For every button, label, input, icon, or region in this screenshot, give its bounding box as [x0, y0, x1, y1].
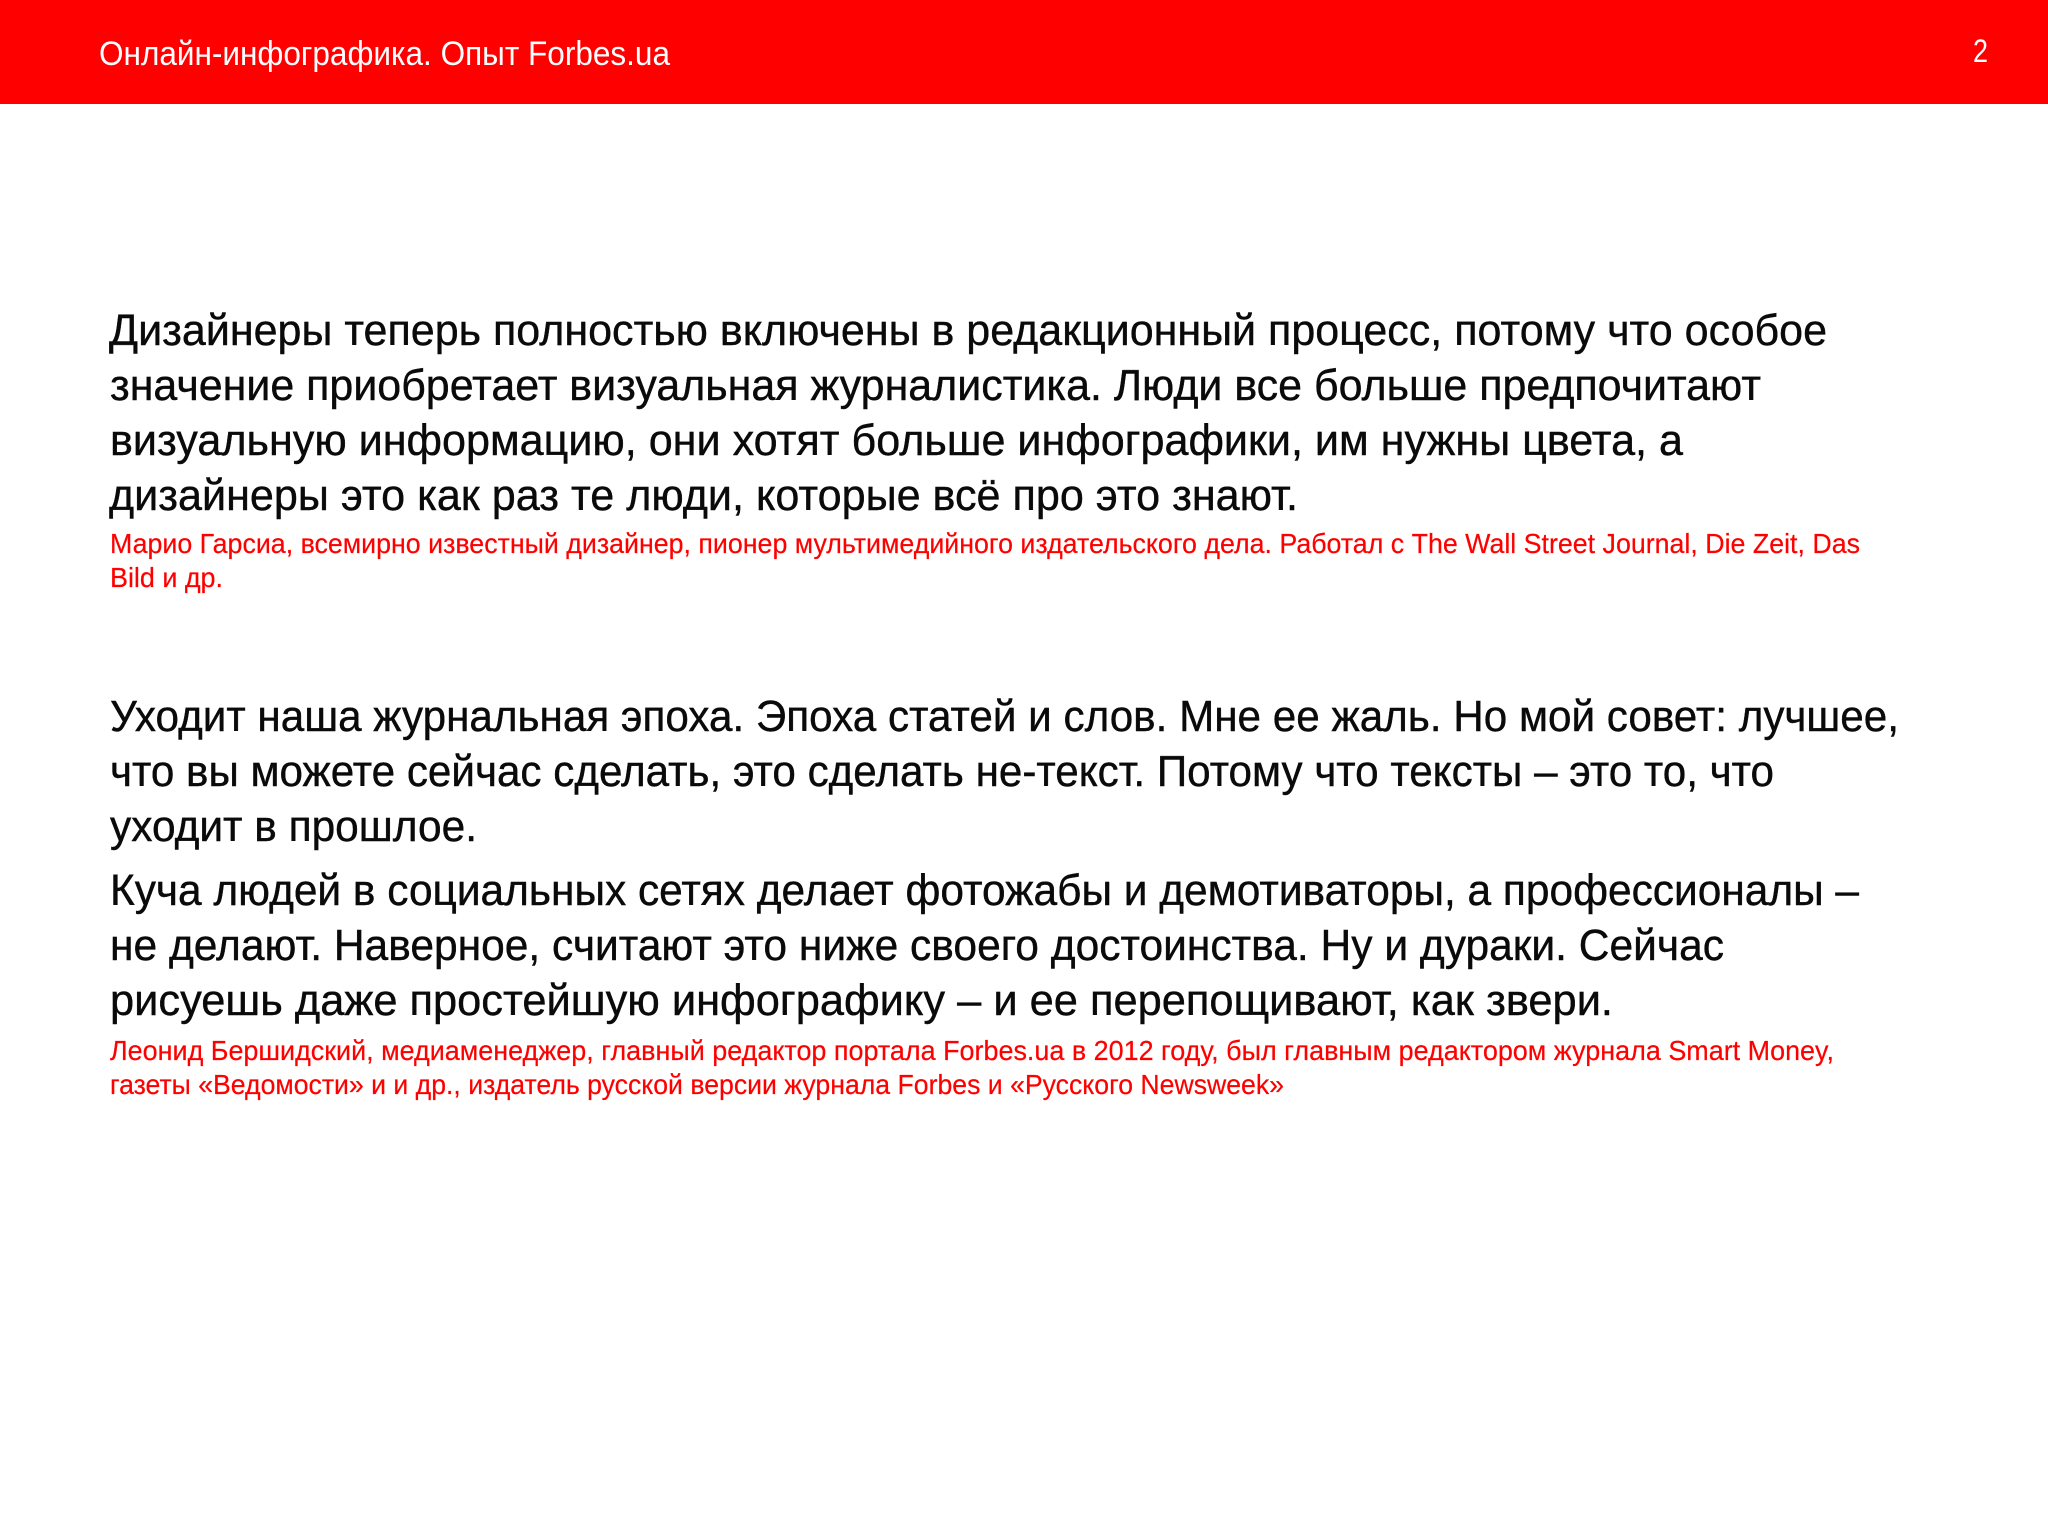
attribution: Leonid Bershidsky: газеты «Ведомости» и и др., издатель русской версии журнала Forbes и «Русского Newsweek»: [110, 1069, 1284, 1100]
quote: Leonid Bershidsky, first paragraph: [110, 692, 1899, 851]
header title: Онлайн-инфографика. Опыт Forbes.ua: [99, 35, 670, 73]
page number: 2: [1973, 33, 1988, 69]
quote: Leonid Bershidsky, first paragraph: Уходит наша журнальная эпоха. Эпоха статей и слов. Мне ее жаль. Но мой совет: лучшее,: [110, 692, 1899, 741]
attribution: Leonid Bershidsky: Леонид Бершидский, медиаменеджер, главный редактор портала Forbes.ua в 2012 году, был главным редактором журнала Smart Money,: [110, 1035, 1834, 1066]
quote: Leonid Bershidsky, second paragraph: не делают. Наверное, считают это ниже своего достоинства. Ну и дураки. Сейчас: [110, 921, 1724, 970]
quote: Mario Garcia: Дизайнеры теперь полностью включены в редакционный процесс, потому что особое: [109, 306, 1827, 355]
quote: Leonid Bershidsky, second paragraph: Куча людей в социальных сетях делает фотожабы и демотиваторы, а профессионалы –: [110, 866, 1860, 915]
quote: Leonid Bershidsky, second paragraph: [110, 866, 1860, 1025]
quote: Leonid Bershidsky, second paragraph: рисуешь даже простейшую инфографику – и ее перепощивают, как звери.: [110, 976, 1613, 1025]
attribution: Mario Garcia: Bild и др.: [110, 562, 223, 593]
header bar: [0, 0, 2048, 104]
attribution: Mario Garcia: [110, 528, 1860, 593]
quote: Mario Garcia: дизайнеры это как раз те люди, которые всё про это знают.: [109, 471, 1298, 520]
attribution: Mario Garcia: Марио Гарсиа, всемирно известный дизайнер, пионер мультимедийного издательского дела. Работал с The Wall Street Journal, Die Zeit, Das: [110, 528, 1860, 559]
quote: Mario Garcia: [109, 306, 1827, 520]
quote: Mario Garcia: значение приобретает визуальная журналистика. Люди все больше предпочитают: [110, 361, 1761, 410]
quote: Mario Garcia: визуальную информацию, они хотят больше инфографики, им нужны цвета, а: [110, 416, 1684, 465]
quote: Leonid Bershidsky, first paragraph: уходит в прошлое.: [110, 802, 477, 851]
quote: Leonid Bershidsky, first paragraph: что вы можете сейчас сделать, это сделать не-текст. Потому что тексты – это то, что: [110, 747, 1774, 796]
attribution: Leonid Bershidsky: [110, 1035, 1834, 1100]
